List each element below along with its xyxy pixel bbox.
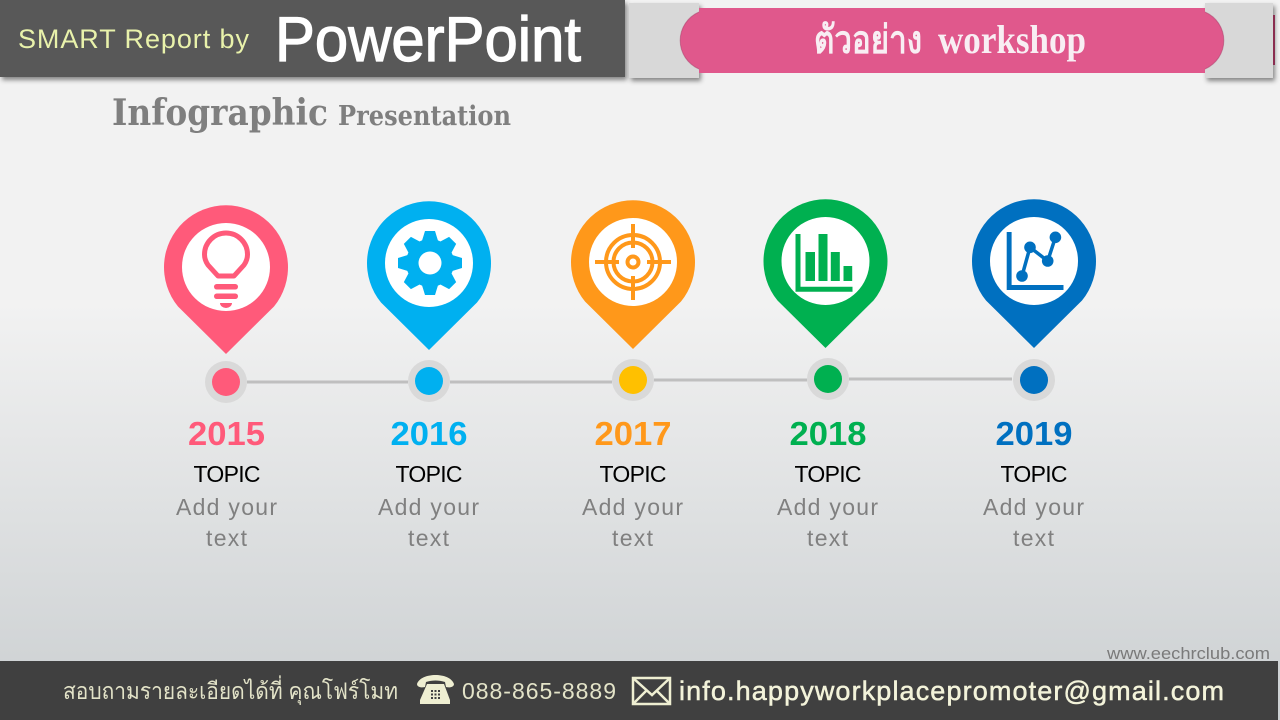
heading: SMART Report by: SMART Report by [18, 24, 250, 54]
icon: bar chart [796, 234, 852, 292]
text block 2018: 2018 [790, 415, 866, 452]
header bar: title [0, 0, 625, 77]
text block 2018 [777, 415, 878, 551]
text block 2019: TOPIC [1000, 461, 1068, 487]
contact text: สอบถามรายละเอียดได้ที่ คุณโฟร์โมท [63, 675, 398, 705]
text block 2015: 2015 [188, 415, 265, 452]
footer bar [0, 661, 1278, 720]
pin: 2016 gear [367, 201, 491, 350]
text block 2015: Add your [176, 494, 277, 520]
text block 2016: text [408, 525, 450, 551]
workshop banner [629, 3, 1275, 78]
timeline dot 2016 [408, 360, 450, 402]
email address: info.happyworkplacepromoter@gmail.com [679, 676, 1224, 706]
text block 2019: Add your [983, 494, 1084, 520]
text block 2018: Add your [777, 494, 878, 520]
text block 2018: text [807, 525, 849, 551]
pin: 2017 target [571, 200, 695, 349]
subtitle: Presentation [338, 101, 511, 132]
banner label: Thai word: ตัวอย่าง [814, 19, 922, 62]
text block 2015: TOPIC [194, 461, 260, 487]
text block 2016: Add your [378, 494, 479, 520]
icon: envelope [633, 678, 670, 704]
heading: PowerPoint: PowerPoint [275, 5, 581, 75]
text block 2016: 2016 [390, 415, 468, 452]
timeline dot 2015 [205, 361, 247, 403]
timeline dot 2017 [612, 359, 654, 401]
text block 2017: TOPIC [600, 461, 666, 487]
pin: 2018 bar chart [764, 199, 888, 348]
text block 2017: Add your [582, 494, 683, 520]
pin: 2015 lightbulb [164, 205, 288, 354]
banner label: workshop: workshop [938, 17, 1086, 62]
text block 2018: TOPIC [794, 461, 862, 487]
timeline dot 2018 [807, 358, 849, 400]
subtitle [112, 92, 511, 134]
timeline connector lines [247, 379, 1012, 382]
text block 2019 [983, 415, 1084, 551]
icon: telephone [417, 675, 454, 704]
text block 2019: 2019 [996, 415, 1072, 452]
icon: lightbulb [204, 233, 248, 308]
phone number: 088-865-8889 [462, 678, 616, 704]
pin: 2019 line chart [972, 199, 1096, 348]
text block 2015: text [206, 525, 248, 551]
icon: target [595, 224, 671, 300]
text block 2019: text [1013, 525, 1055, 551]
text block 2017: text [612, 525, 654, 551]
website label: www.eechrclub.com [1106, 644, 1270, 663]
subtitle: Infographic [112, 92, 328, 134]
icon: line chart [1007, 232, 1064, 290]
text block 2015 [176, 415, 277, 551]
text block 2016 [378, 415, 479, 551]
text block 2016: TOPIC [396, 461, 462, 487]
text block 2017 [582, 415, 683, 551]
timeline dot 2019 [1013, 359, 1055, 401]
text block 2017: 2017 [594, 415, 672, 452]
icon: gear [398, 231, 462, 295]
